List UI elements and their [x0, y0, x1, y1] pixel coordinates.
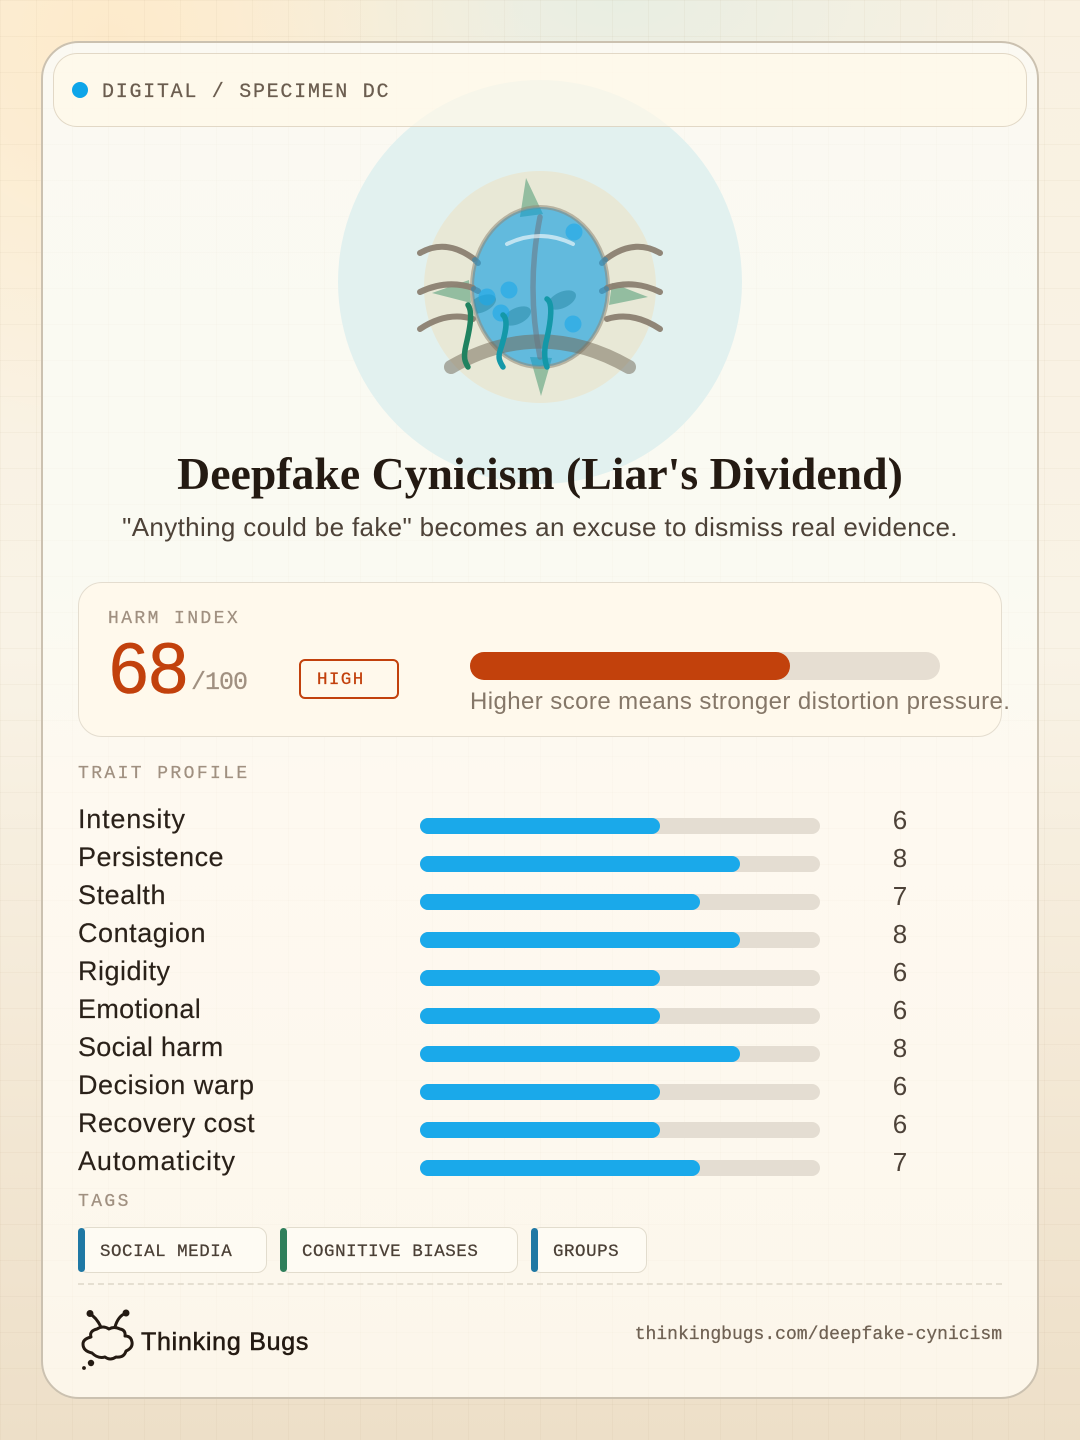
chart: trait profile: 6 [893, 1109, 907, 1139]
icon: bug cloud [82, 1310, 134, 1370]
harm bar [470, 652, 940, 680]
icon: category dot [72, 82, 88, 98]
header bar [53, 53, 1027, 127]
chart: trait profile [78, 804, 907, 1177]
panel: harm index [78, 582, 1002, 737]
chart: trait profile: Stealth [78, 880, 166, 910]
chart: trait profile: Decision warp [78, 1070, 255, 1100]
category label: DIGITAL / SPECIMEN DC [102, 81, 390, 104]
title: Deepfake Cynicism (Liar's Dividend) [177, 448, 903, 499]
tag: cognitive biases: COGNITIVE BIASES [302, 1242, 478, 1262]
chart: trait profile: 7 [893, 881, 907, 911]
chart: trait profile: Social harm [78, 1032, 224, 1062]
harm score: 68 [109, 630, 188, 709]
harm note: Higher score means stronger distortion pressure. [470, 688, 1010, 715]
subtitle: "Anything could be fake" becomes an excuse to dismiss real evidence. [122, 512, 958, 542]
source url: thinkingbugs.com/deepfake-cynicism [635, 1325, 1002, 1345]
harm index label: HARM INDEX [108, 609, 240, 629]
chart: trait profile: 6 [893, 805, 907, 835]
chart: trait profile: Emotional [78, 994, 201, 1024]
tag: groups: GROUPS [553, 1242, 619, 1262]
tag: social media [78, 1227, 267, 1273]
logo: Thinking Bugs [82, 1310, 309, 1370]
chart: trait profile: 7 [893, 1147, 907, 1177]
tag: cognitive biases [280, 1227, 518, 1273]
chart: trait profile: 8 [893, 919, 907, 949]
severity badge [299, 659, 399, 699]
chart: trait profile: 6 [893, 1071, 907, 1101]
severity badge: HIGH [317, 670, 365, 690]
score denominator: /100 [191, 668, 247, 697]
tag: social media: SOCIAL MEDIA [100, 1242, 232, 1262]
chart: trait profile: Rigidity [78, 956, 171, 986]
chart: trait profile: Persistence [78, 842, 224, 872]
chart: trait profile: Contagion [78, 918, 206, 948]
illustration: deepfake bug [338, 127, 742, 484]
tag: groups [531, 1227, 647, 1273]
chart: trait profile: Recovery cost [78, 1108, 255, 1138]
chart: trait profile: 6 [893, 995, 907, 1025]
tags heading: TAGS [78, 1192, 131, 1212]
brand name: Thinking Bugs [141, 1328, 309, 1356]
chart: trait profile: 8 [893, 1033, 907, 1063]
chart: trait profile: 6 [893, 957, 907, 987]
chart: trait profile: Intensity [78, 804, 186, 834]
trait profile heading: TRAIT PROFILE [78, 764, 250, 784]
chart: trait profile: 8 [893, 843, 907, 873]
chart: trait profile: Automaticity [78, 1146, 236, 1176]
